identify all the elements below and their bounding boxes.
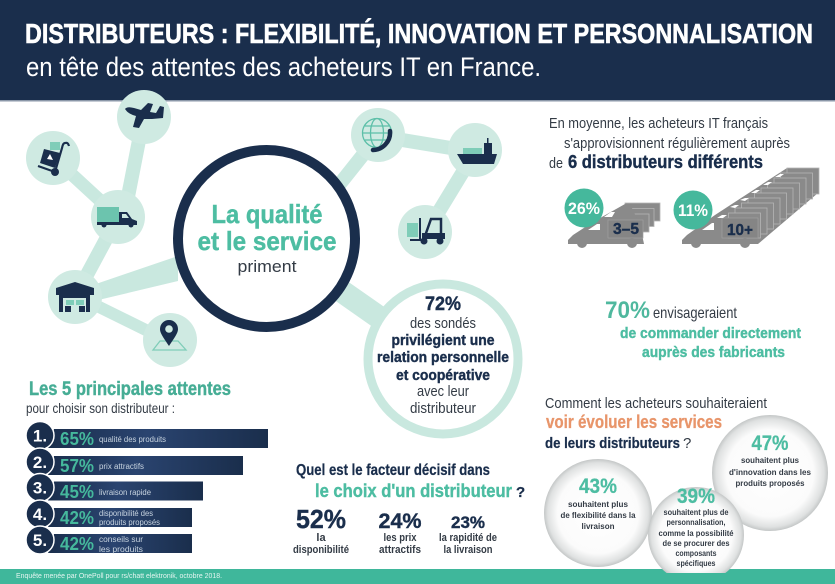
text: six distributors: s'approvisionnent régulièrement auprès: [564, 135, 790, 152]
bubble: 47 percent: d'innovation dans les: [729, 467, 811, 477]
bubble: 39 percent: souhaitent plus de: [664, 508, 729, 517]
bar 2: [26, 448, 243, 476]
text: 70 percent manufacturers: envisageraient: [653, 305, 737, 322]
icon: hand trolley: [26, 131, 80, 185]
bubble: 47 percent: 47%: [752, 432, 789, 455]
bubble: 47 percent: produits proposés: [736, 478, 805, 488]
badge: 11 percent: [674, 190, 712, 230]
bar 1: [26, 422, 268, 450]
bar 4: 42%: [60, 508, 94, 528]
bubble: 39 percent: de se procurer des: [662, 539, 730, 548]
bubble: 43 percent: de flexibilité dans la: [560, 510, 636, 520]
question: [296, 462, 525, 501]
bar 3: 3.: [33, 478, 47, 498]
bubble: 43 percent: 43%: [579, 475, 617, 498]
bubble: 47 percent: [712, 415, 828, 531]
bubble: 39 percent: composants: [676, 549, 717, 558]
icon: globe and phone: [351, 108, 405, 162]
heading: service evolution: [545, 395, 768, 452]
icon: delivery truck: [91, 190, 145, 244]
text: 70 percent manufacturers: de commander directement: [620, 326, 801, 342]
central circle: quality and service: [178, 150, 355, 327]
icon: forklift: [398, 205, 452, 259]
text: 70 percent manufacturers: [605, 297, 801, 361]
badge: 11 percent: 11%: [678, 201, 708, 220]
label: 3–5: [613, 221, 639, 238]
heading: service evolution: voir évoluer les services: [546, 412, 722, 432]
bar 1: 1.: [33, 426, 47, 446]
stat: 23 percent: la livraison: [444, 544, 493, 556]
question: le choix d'un distributeur: [315, 481, 512, 501]
subtitle: en tête des attentes des acheteurs IT en France.: [26, 52, 541, 82]
central heading: La qualité: [212, 199, 322, 229]
bar 5: 42%: [60, 534, 94, 554]
bubble: 39 percent: spécifiques: [676, 559, 716, 568]
bar chart: expectations: [26, 422, 268, 554]
text: six distributors: En moyenne, les acheteurs IT français: [549, 115, 768, 132]
heading: service evolution: ?: [683, 435, 691, 452]
header band: [0, 0, 835, 102]
callout: 72 percent: avec leur: [417, 383, 469, 400]
stat: 52 percent: 52%: [296, 504, 346, 534]
bubble: 39 percent: comme la possibilité: [658, 529, 734, 538]
callout: 72 percent: et coopérative: [396, 367, 490, 384]
central circle: quality and service: et le service: [198, 226, 336, 256]
bar 3: livraison rapide: [99, 488, 152, 497]
stat: 24 percent: attractifs: [379, 544, 421, 556]
bar 2: prix attractifs: [99, 462, 144, 471]
bar 4: disponibilité des: [99, 509, 153, 518]
stat: 52 percent: [293, 504, 349, 556]
heading: service evolution: de leurs distributeurs: [545, 435, 680, 452]
callout: 72 percent: des sondés: [410, 315, 476, 332]
heading: top five expectations: [26, 379, 231, 416]
stat: 24 percent: [378, 510, 422, 556]
text: 70 percent manufacturers: 70%: [605, 297, 650, 324]
icon: cargo ship: [448, 123, 502, 177]
badge: 26 percent: 26%: [568, 199, 600, 218]
stat: 23 percent: 23%: [451, 513, 485, 532]
bar 1: qualité des produits: [99, 435, 166, 444]
bubble: 39 percent: [648, 487, 744, 573]
stat: 24 percent: 24%: [378, 510, 422, 533]
bar 1: 65%: [60, 429, 94, 449]
text: six distributors: 6 distributeurs différents: [568, 152, 763, 172]
source note: Enquête menée par OnePoll pour rs/chatt elektronik, octobre 2018.: [16, 573, 222, 580]
bar 2: 2.: [33, 453, 47, 472]
bubble: 43 percent: [544, 459, 652, 567]
stat: 52 percent: la: [316, 532, 326, 544]
bar 5: conseils sur: [99, 535, 143, 544]
text: six distributors: de: [549, 155, 563, 172]
stat: 23 percent: [439, 513, 497, 556]
bar 3: [26, 474, 203, 502]
bar 5: [26, 526, 192, 554]
question: ?: [516, 484, 525, 501]
bubble: 43 percent: livraison: [582, 521, 614, 531]
bar 4: 4.: [33, 505, 47, 524]
heading: top five expectations: Les 5 principales attentes: [29, 379, 231, 400]
vans: 10 plus: [674, 168, 819, 248]
stat: 23 percent: la rapidité de: [439, 532, 497, 544]
text: 70 percent manufacturers: auprès des fabricants: [642, 345, 785, 361]
heading: top five expectations: pour choisir son distributeur :: [26, 400, 175, 416]
callout: 72 percent: distributeur: [410, 400, 476, 417]
icon: warehouse: [48, 270, 102, 324]
bubble: 39 percent: personnalisation,: [666, 518, 726, 527]
icon: plane: [117, 90, 171, 144]
bar 5: 5.: [33, 531, 47, 550]
callout: 72 percent: relation personnelle: [377, 349, 509, 366]
bar 2: 57%: [60, 456, 94, 476]
text: six distributors: [549, 115, 790, 172]
network connectors: [54, 125, 475, 337]
footer band: [0, 569, 835, 584]
central subtext: priment: [238, 257, 297, 276]
callout: 72 percent: 72%: [425, 294, 461, 315]
label: 10+: [727, 222, 753, 239]
panel: deciding factor: [293, 462, 525, 556]
bar 4: [26, 500, 192, 528]
question: Quel est le facteur décisif dans: [296, 462, 490, 479]
vans: 3 to 5: [564, 188, 660, 248]
bubble: 43 percent: souhaitent plus: [568, 499, 628, 509]
bar 5: les produits: [99, 545, 143, 554]
bar 4: produits proposés: [99, 518, 160, 527]
icon: map pin: [143, 313, 197, 367]
heading: service evolution: Comment les acheteurs souhaiteraient: [545, 395, 768, 412]
bubble: 39 percent: 39%: [677, 485, 715, 508]
bar 3: 45%: [60, 482, 94, 502]
stat: 24 percent: les prix: [384, 532, 417, 544]
callout: 72 percent: [368, 284, 518, 434]
stat: 52 percent: disponibilité: [293, 544, 349, 556]
callout: 72 percent: privilégient une: [392, 332, 494, 349]
bubble: 47 percent: souhaitent plus: [741, 455, 799, 465]
